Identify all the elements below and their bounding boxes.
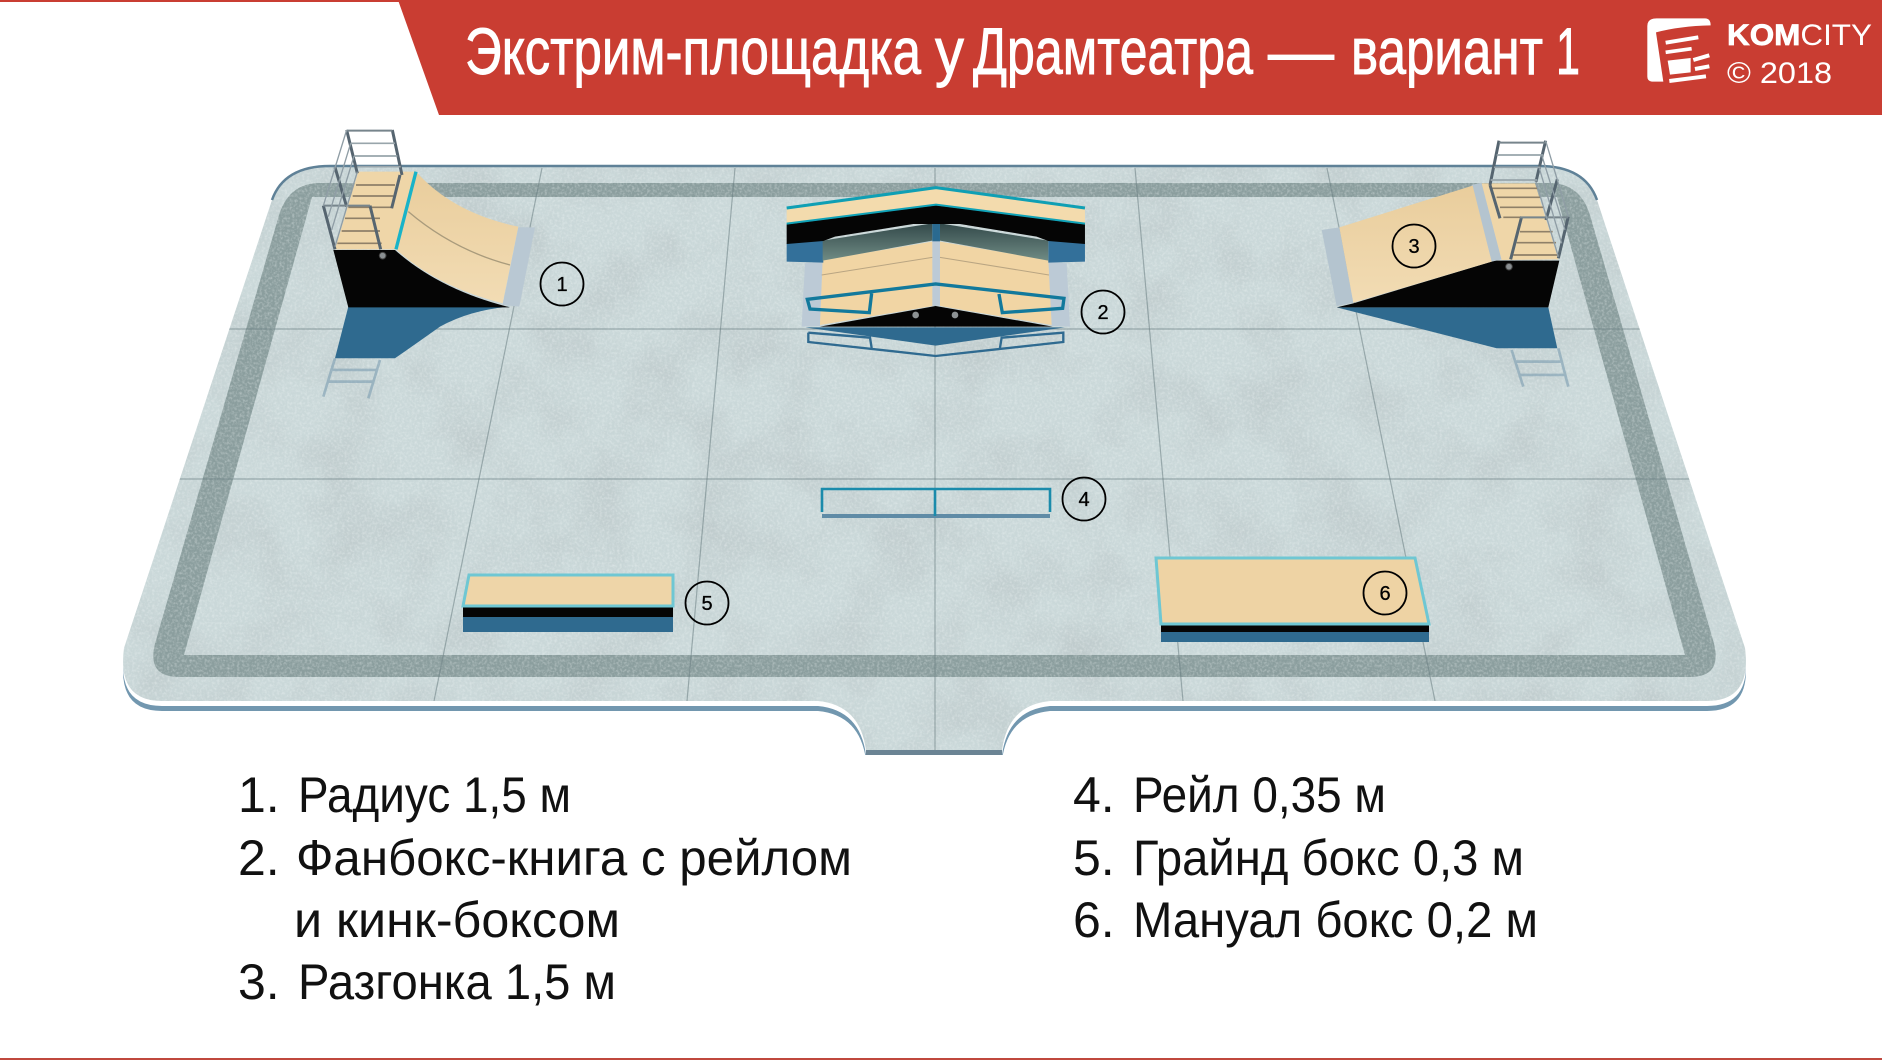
ramp 1 curved deck	[396, 172, 518, 303]
concrete surface	[100, 150, 1780, 770]
funbox base	[820, 306, 1053, 327]
funbox upper deck	[787, 187, 1085, 224]
funbox upper black	[787, 205, 1085, 244]
marker 6: 6	[1379, 583, 1391, 605]
ramp 3 railings	[1490, 141, 1568, 259]
funbox shadow	[805, 327, 1065, 346]
logo wordmark: KOMCITY	[1727, 19, 1872, 52]
legend item 1: Радиус 1,5 м	[298, 767, 571, 823]
legend right column	[1073, 767, 1538, 948]
title: Экстрим-площадка	[465, 14, 921, 88]
top edge line	[272, 166, 1597, 200]
funbox rail shadow	[808, 333, 1063, 356]
ramp 1 shadow	[323, 307, 510, 398]
icon: newspaper	[1647, 18, 1711, 82]
ramp 3 side	[1337, 261, 1559, 307]
marker 3	[1392, 224, 1436, 268]
marker 2: 2	[1097, 302, 1109, 324]
ramp 1 coping	[396, 172, 416, 249]
marker 1	[540, 262, 584, 306]
funbox bolts	[912, 312, 958, 318]
legend left column	[238, 767, 852, 1010]
marker 3: 3	[1408, 236, 1420, 258]
ramp 3 platform	[1482, 183, 1558, 260]
perimeter band	[153, 183, 1716, 677]
marker 2	[1082, 290, 1124, 334]
obstacle 4: rail	[822, 489, 1050, 516]
legend item 4: Рейл 0,35 м	[1133, 767, 1386, 823]
obstacle 5: grind box	[463, 575, 673, 632]
marker 5: 5	[701, 593, 713, 615]
ramp 3 shadow	[1337, 307, 1568, 387]
title: 1	[1556, 14, 1580, 88]
legend item 2: и кинк-боксом	[294, 892, 620, 948]
legend item 3: Разгонка 1,5 м	[298, 954, 616, 1010]
ramp 3 bolt	[1506, 263, 1512, 270]
obstacle 6: manual box	[1156, 558, 1429, 642]
ramp 3 metal lips	[1322, 183, 1502, 306]
logo year: © 2018	[1727, 57, 1832, 90]
legend item 1: 1.	[238, 767, 280, 823]
legend item 3: 3.	[238, 954, 280, 1010]
marker 4: 4	[1078, 489, 1090, 511]
legend item 6: Мануал бокс 0,2 м	[1133, 892, 1538, 948]
legend item 2: 2.	[238, 830, 280, 886]
ramp 1 bolt	[379, 252, 386, 259]
legend item 6: 6.	[1073, 892, 1115, 948]
funbox metal sides	[802, 241, 1070, 327]
title: —	[1268, 14, 1334, 88]
road threshold	[866, 750, 1002, 755]
ramp 2: funbox with rail	[787, 187, 1085, 356]
ramp 1 platform	[335, 172, 415, 249]
ramp 3: launch ramp	[1322, 141, 1568, 387]
legend item 2: Фанбокс-книга с рейлом	[296, 830, 852, 886]
legend item 2	[238, 830, 852, 948]
legend item 5: Грайнд бокс 0,3 м	[1133, 830, 1524, 886]
funbox wood slopes	[820, 242, 1052, 325]
legend item 4: 4.	[1073, 767, 1115, 823]
slab joints	[160, 168, 1709, 750]
ramp 1: quarter pipe	[323, 130, 535, 398]
plaza rim	[123, 171, 1746, 765]
title: вариант	[1351, 14, 1543, 88]
funbox rail	[807, 284, 1064, 313]
ramp 3 deck	[1339, 186, 1492, 303]
logo: KOMCITY	[1647, 18, 1872, 90]
marker 5	[686, 582, 728, 624]
ramp 1 metal lip	[503, 227, 535, 307]
marker 4	[1062, 478, 1106, 520]
skate plaza	[100, 130, 1780, 770]
title: Драмтеатра	[973, 14, 1253, 88]
legend item 5: 5.	[1073, 830, 1115, 886]
marker 1: 1	[556, 274, 568, 296]
marker 6	[1364, 572, 1406, 614]
ramp 1 railings	[323, 130, 402, 249]
title	[465, 14, 1580, 88]
header banner	[0, 0, 1882, 115]
funbox back shadow	[787, 223, 1085, 263]
title: у	[935, 14, 964, 88]
ramp 1 side	[333, 250, 510, 307]
